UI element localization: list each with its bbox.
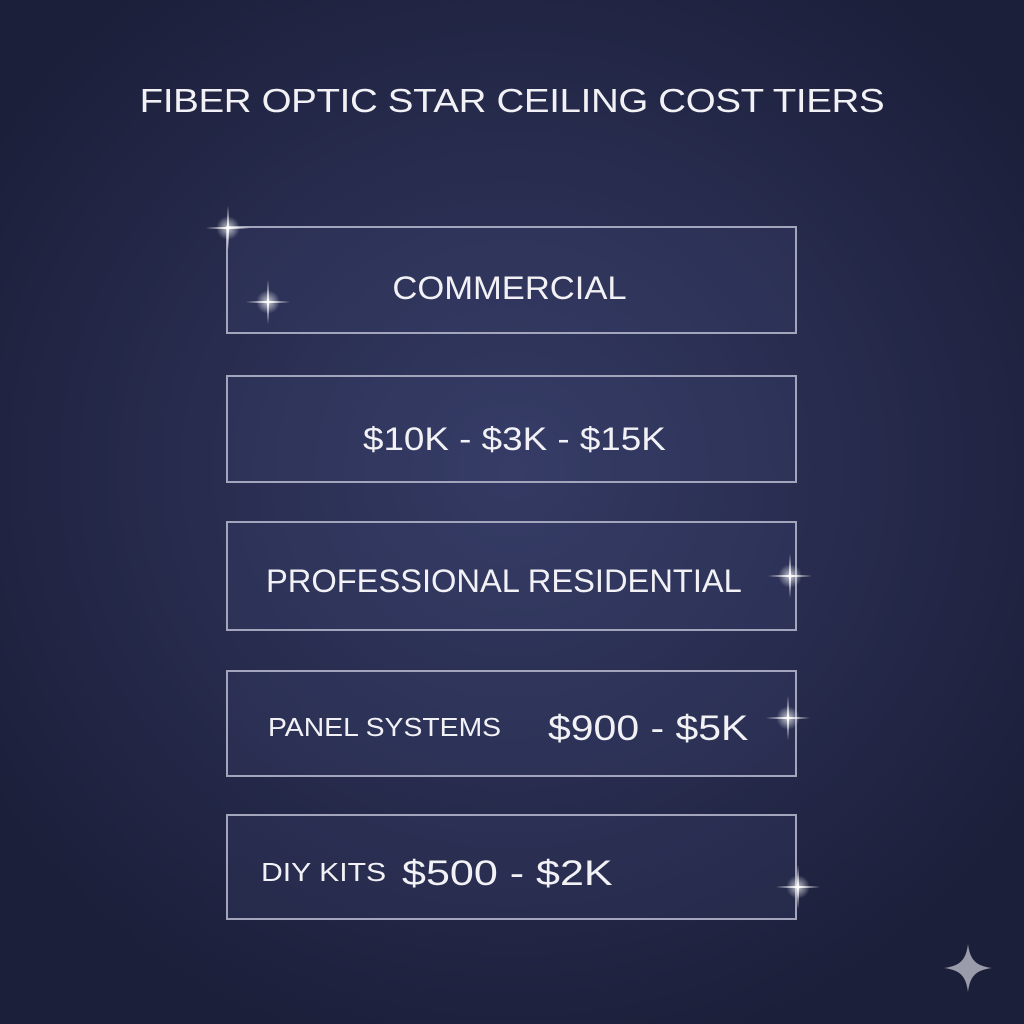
panel: panel systems: $900 - $5K [548,709,748,748]
panel: diy kits [226,814,797,920]
sparkle [787,717,789,719]
panel: diy kits: DIY KITS [261,857,386,887]
panel: professional residential: PROFESSIONAL RESIDENTIAL [266,563,742,599]
sparkle [267,301,269,303]
icon: four-point star [944,944,992,992]
panel: commercial: COMMERCIAL [392,270,627,306]
sparkle [227,227,229,229]
panel: panel systems [226,670,797,777]
sparkle [789,575,791,577]
panel: professional residential [226,521,797,631]
panel: diy kits: $500 - $2K [402,854,613,893]
panel: commercial [226,226,797,334]
panel: commercial price: $10K - $3K - $15K [363,421,666,457]
panel: panel systems: PANEL SYSTEMS [268,712,501,742]
panel: commercial price [226,375,797,483]
title: FIBER OPTIC STAR CEILING COST TIERS [140,82,884,119]
sparkle [797,886,799,888]
